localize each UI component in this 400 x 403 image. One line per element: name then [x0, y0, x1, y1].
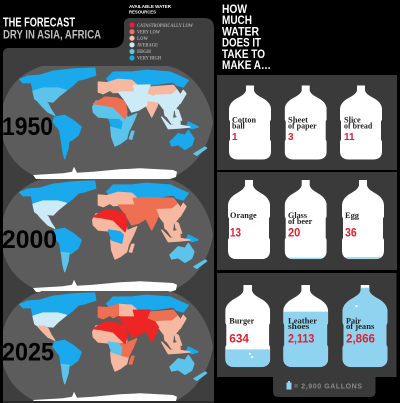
bottle: glass of beer: of beer — [288, 217, 313, 226]
bottle: cotton ball: 1 — [232, 132, 238, 143]
bottle: burger: Burger — [229, 316, 255, 325]
bottle: slice of bread — [339, 86, 383, 160]
year label: 1950: 1950 — [2, 113, 53, 141]
bottle: egg: 36 — [345, 228, 357, 240]
title: DRY IN ASIA, AFRICA — [3, 27, 101, 41]
bottle: sheet of paper: of paper — [288, 121, 317, 130]
bottle: orange: Orange — [230, 211, 257, 220]
year label: 2025: 2025 — [2, 338, 54, 366]
heading: how much water: MAKE A… — [222, 60, 271, 72]
legend: available water resources: LOW — [137, 37, 148, 42]
bottle: pair of jeans: of jeans — [346, 322, 374, 331]
legend: available water resources — [129, 4, 193, 62]
bottle: leather shoes: 2,113 — [288, 332, 315, 346]
bottle: leather shoes — [282, 285, 329, 368]
legend: available water resources: CATASTROPHICALLY LOW — [137, 24, 193, 29]
panel: row 3 — [217, 273, 396, 377]
bottle: glass of beer: 20 — [288, 228, 300, 240]
bottle: sheet of paper: 3 — [288, 132, 294, 143]
bottle: egg: Egg — [345, 211, 359, 220]
bottle: slice of bread: of bread — [344, 121, 373, 130]
bottle: glass of beer — [284, 180, 328, 261]
heading: how much water: WATER — [222, 26, 260, 38]
bottle: glass of beer: Glass — [288, 211, 307, 220]
bottle: slice of bread: Slice — [344, 116, 361, 125]
heading: how much water — [222, 4, 271, 72]
legend tab: 2,900 gallons — [273, 377, 376, 397]
bottle: orange: 13 — [230, 228, 241, 240]
bottle: cotton ball: Cotton — [232, 116, 257, 125]
bottle: egg — [341, 180, 385, 260]
panel: row 2 — [217, 172, 397, 270]
legend: available water resources: RESOURCES — [129, 10, 156, 14]
legend: available water resources: AVERAGE — [137, 44, 159, 48]
heading: how much water: TAKE TO — [222, 49, 265, 61]
bottle: pair of jeans: Pair — [346, 316, 361, 325]
title — [3, 16, 101, 41]
legend: available water resources: AVAILABLE WATER — [129, 4, 172, 9]
legend: available water resources: HIGH — [137, 50, 151, 55]
bottle: cotton ball — [228, 86, 272, 160]
map: 2000 — [3, 179, 213, 292]
bottle: sheet of paper — [284, 86, 328, 160]
map: 1950 — [3, 66, 213, 179]
bottle: cotton ball: ball — [232, 121, 245, 130]
legend: available water resources: VERY LOW — [137, 30, 160, 36]
bottle: burger — [224, 285, 271, 368]
title: THE FORECAST — [3, 16, 75, 30]
legend: available water resources: VERY HIGH — [137, 57, 161, 62]
bottle: slice of bread: 11 — [344, 132, 355, 143]
heading: how much water: MUCH — [222, 15, 252, 27]
bottle: sheet of paper: Sheet — [288, 116, 308, 125]
panel: map background — [3, 18, 214, 403]
heading: how much water: HOW — [222, 4, 247, 16]
bottle: pair of jeans: 2,866 — [346, 332, 375, 346]
map: 2025 — [3, 291, 213, 403]
bottle: burger: 634 — [229, 332, 249, 346]
year label: 2000: 2000 — [2, 226, 57, 254]
bottle: orange — [227, 180, 271, 260]
bottle: leather shoes: Leather — [288, 316, 317, 325]
bottle: leather shoes: shoes — [288, 322, 309, 331]
bottle: pair of jeans — [341, 285, 389, 368]
panel: row 1 — [217, 75, 397, 170]
heading: how much water: DOES IT — [222, 38, 261, 50]
legend tab: 2,900 gallons: = 2,900 GALLONS — [294, 384, 362, 390]
